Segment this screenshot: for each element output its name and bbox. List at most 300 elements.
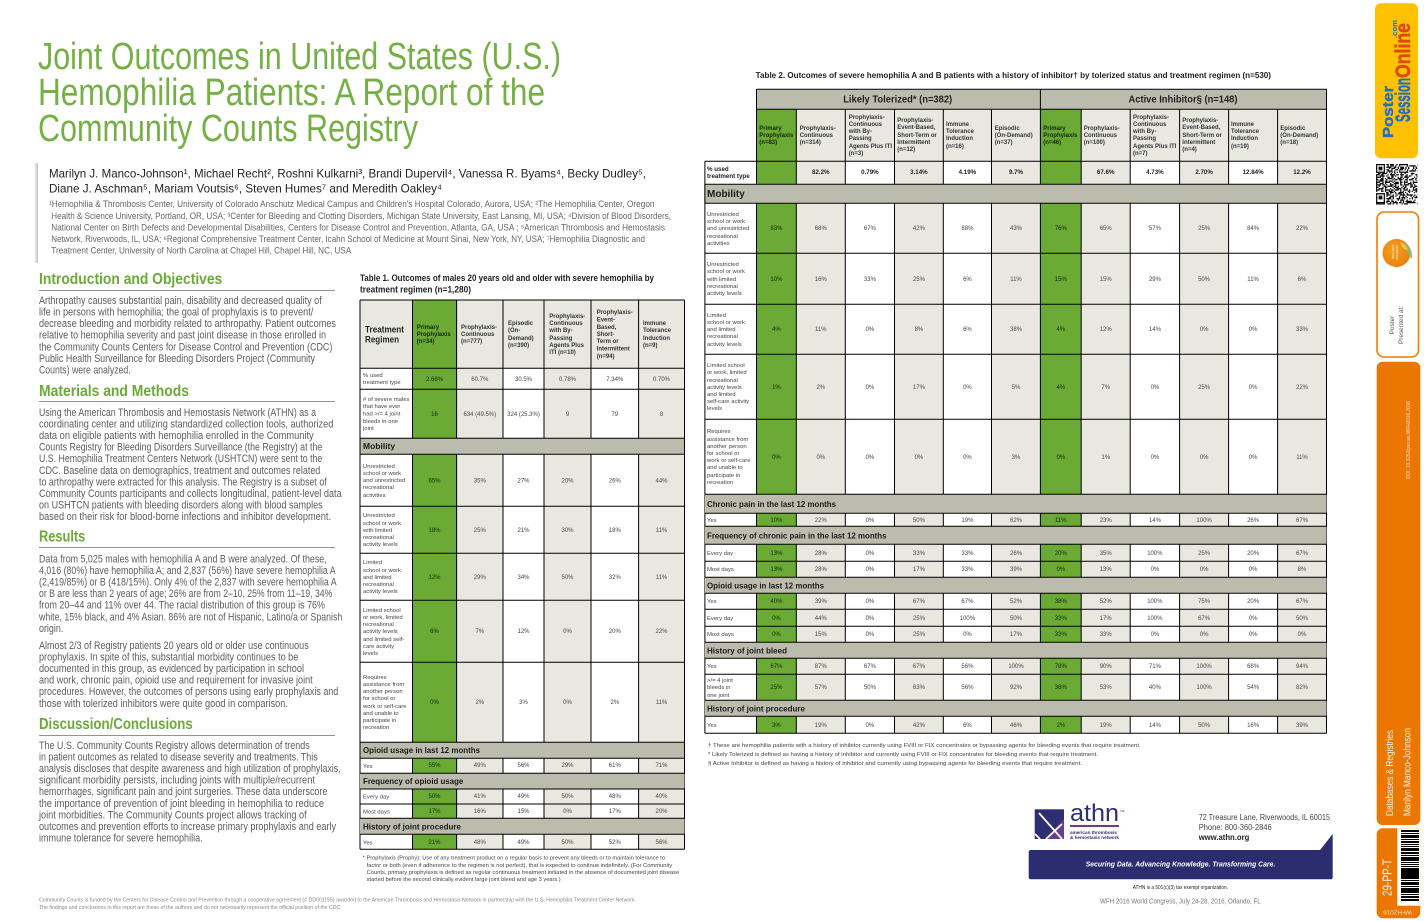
table 2 values: 20% — [1247, 599, 1260, 605]
table 1 row labels: and unrestricted — [363, 478, 405, 484]
table 2 column headers: active inhibitor: Prophylaxis- — [1084, 126, 1120, 132]
table 2 values: 52% — [1010, 599, 1023, 605]
table 2 values: 1% — [1101, 455, 1111, 461]
table 1 header: Continuous — [461, 332, 495, 338]
title: Community Counts Registry — [38, 108, 418, 150]
table 1 header: (n=777) — [461, 339, 482, 345]
table 2 column headers: likely tolerized: Prophylaxis — [759, 133, 794, 139]
table 1 header: (n=94) — [597, 354, 615, 360]
table 1 values: 49% — [517, 840, 530, 846]
table 2 row labels: or work, limited — [707, 370, 747, 376]
table 1 row labels: with limited — [362, 528, 392, 534]
table 1 row labels: participate in — [363, 718, 396, 724]
table 1 values: 11% — [656, 700, 668, 706]
table 1 row labels: work or self-care — [362, 704, 407, 710]
table 2 values: 67% — [770, 664, 783, 670]
table 1 row labels: activities — [363, 493, 386, 499]
table 2 values: 22% — [815, 518, 827, 524]
table 2 values: 0% — [1249, 616, 1258, 622]
table 1 row labels: activity levels — [363, 589, 398, 595]
table 2 row labels: activity levels — [707, 342, 742, 348]
table 2 values: 56% — [961, 664, 974, 670]
heading: results: Results — [39, 529, 85, 546]
affiliations: National Center on Birth Defects and Developmental Disabilities, Centers for Disease Control and Prevention, Atlanta, GA, USA ; ⁵American Thrombosis and Hemostasis — [51, 222, 665, 232]
table 1 row labels: joint — [362, 426, 374, 432]
table 1 values: 50% — [561, 794, 574, 800]
barcode — [1401, 830, 1419, 901]
table 2 row labels: activity levels — [707, 385, 742, 391]
table 2 row labels: Every day — [707, 616, 733, 622]
text block: materials and methods: Counts Registry for Bleeding Disorders Surveillance (the Registry) at the — [39, 442, 322, 454]
table 2 values: 0% — [1151, 385, 1160, 391]
table 2 values: 14% — [1149, 723, 1162, 729]
table 2 column headers: likely tolerized: (n=16) — [946, 144, 964, 150]
table 2 values: 0% — [866, 723, 875, 729]
table 1 primary prophylaxis values: 17% — [428, 809, 441, 815]
table 1 values: 29% — [474, 575, 486, 581]
table 2 row labels: Yes — [707, 723, 717, 729]
table 2 values: 84% — [1247, 226, 1260, 232]
table 2 column headers: active inhibitor: Prophylaxis — [1043, 133, 1078, 139]
table 2 column headers: active inhibitor: (n=4) — [1182, 147, 1197, 153]
table 2 row labels: treatment type — [707, 173, 750, 180]
athn address: Phone: 800-360-2846 — [1199, 822, 1272, 832]
table 2 values: 5% — [1012, 385, 1021, 391]
table 2 column headers: active inhibitor: Agents Plus ITI — [1133, 144, 1177, 150]
table 2 values: 67% — [961, 599, 974, 605]
table 1 row labels: school or work — [363, 568, 401, 574]
table 1 row labels: Unrestricted — [363, 513, 395, 519]
table 2 values: 50% — [913, 518, 926, 524]
table 2 row labels: activities — [707, 241, 730, 247]
table 2 values: 100% — [1196, 518, 1212, 524]
table 2 values: 6% — [963, 277, 972, 283]
athn address: www.athn.org — [1198, 832, 1249, 842]
table 1 row labels: Opioid usage in last 12 months — [363, 745, 480, 755]
table 2 values: 40% — [1149, 685, 1162, 691]
table 1 footnote: Counts, primary prophylaxis is defined as regular continuous treatment initiated in the absence of documented joint disease — [367, 870, 679, 876]
table 2 column headers: active inhibitor: Immune — [1231, 122, 1255, 128]
table 2 row labels: one joint — [707, 693, 730, 699]
table 1 values: 634 (49.5%) — [463, 412, 496, 418]
table 2 values: 56% — [961, 685, 974, 691]
text block: materials and methods: Using the American Thrombosis and Hemostasis Network (ATHN) as a — [39, 407, 316, 419]
table 2 column headers: active inhibitor: Short-Term or — [1182, 133, 1223, 139]
text block: results paragraph 1: or B are less than 2 years of age; 26% are from 2–10, 25% from 11–19, 34% — [39, 588, 333, 600]
table 2 values: 14% — [1149, 518, 1162, 524]
table 2 values: 4.19% — [959, 169, 977, 176]
table 2 values: 82% — [1296, 685, 1309, 691]
table 1 header: Primary — [417, 325, 440, 331]
table 1 values: 8 — [660, 412, 664, 418]
table 1 values: 7% — [475, 629, 485, 635]
text block: introduction: decrease bleeding and morbidity related to arthropathy. Patient outcomes — [39, 318, 336, 330]
table 2 values: 0% — [1298, 632, 1307, 638]
presented at text: Presented at: — [1398, 306, 1405, 344]
affiliations: Network, Riverwoods, IL, USA; ⁶Regional Comprehensive Treatment Center, Icahn School of Medicine at Mount Sinai, New York, NY, USA; ⁷Hemophilia Diagnostic and — [51, 234, 645, 244]
table 1 values: 41% — [474, 794, 486, 800]
category and author — [1384, 728, 1414, 816]
table 2 row labels: assistance from — [707, 437, 748, 443]
table 1 row labels: had >/= 4 joint — [363, 412, 401, 418]
table 2 values: 28% — [815, 551, 827, 557]
table 1 row labels: recreational — [363, 622, 394, 628]
table 2 column headers: likely tolerized: Short-Term or — [897, 133, 938, 139]
table 2 values: 11% — [1247, 277, 1260, 283]
text block: materials and methods: data on eligible patients with hemophilia enrolled in the Community — [39, 430, 314, 442]
table 2 column headers: active inhibitor: (n=100) — [1084, 140, 1105, 146]
table 2 values: 0% — [1151, 567, 1160, 573]
authors — [49, 166, 646, 196]
table 2 column headers: likely tolerized: Primary — [759, 126, 782, 132]
heading: discussion: Discussion/Conclusions — [39, 716, 193, 733]
table 2 values: 0% — [866, 599, 875, 605]
table 2 group headers — [843, 94, 1238, 106]
table 1 values: 34% — [517, 575, 530, 581]
table 2 column headers: likely tolerized: (On-Demand) — [995, 133, 1033, 139]
table 1 values: 56% — [517, 763, 530, 769]
funding note: The findings and conclusions in this report are those of the authors and do not necessarily represent the official position of the CDC. — [39, 905, 342, 911]
table 1 footnote: * Prophylaxis (Prophy): Use of any treatment product on a regular basis to prevent any bleeds or to maintain tolerance to — [363, 856, 665, 862]
table 2 column headers: likely tolerized: Passing — [849, 136, 872, 142]
table 1 header: Based, — [597, 325, 617, 331]
table 1 values: 22% — [655, 629, 668, 635]
table 2 values: 40% — [770, 599, 783, 605]
table 2 column headers: likely tolerized: Event-Based, — [897, 125, 936, 131]
table 2 values: 3.14% — [910, 169, 928, 176]
table 2 values: 0% — [1249, 567, 1258, 573]
table 1 row labels: Mobility — [363, 441, 395, 451]
table 2 values: 94% — [1296, 664, 1309, 670]
panel: results — [38, 529, 342, 710]
table 2 values: 63% — [913, 685, 926, 691]
table 2 values: 13% — [1100, 567, 1112, 573]
table 1 row labels: activity levels — [363, 542, 398, 548]
logo wordmark — [1070, 800, 1125, 840]
table 2 row labels: Unrestricted — [707, 262, 739, 268]
text block: discussion: immune tolerance for severe hemophilia. — [39, 832, 203, 844]
table 1 row labels: school or work — [363, 521, 401, 527]
table 1 values: 18% — [609, 528, 621, 534]
table 1 title: treatment regimen (n=1,280) — [360, 284, 471, 294]
table 1 values: 79 — [611, 412, 619, 418]
table 2 values: 0% — [866, 567, 875, 573]
table 2 row labels: and limited — [707, 392, 736, 398]
table 2 group headers: Active Inhibitor§ (n=148) — [1128, 94, 1238, 106]
table 1 values: 16% — [474, 809, 486, 815]
table 2 values: 12% — [1100, 327, 1112, 333]
table 2 row labels: Yes — [707, 599, 717, 605]
table 2 values: 57% — [1149, 226, 1162, 232]
text block: discussion: The U.S. Community Counts Registry allows determination of trends — [39, 740, 310, 752]
table 2 values: 33% — [913, 551, 926, 557]
table 1 header: Agents Plus — [549, 343, 585, 349]
table 2 values: 17% — [1010, 632, 1023, 638]
table 1 values: 26% — [609, 478, 621, 484]
table 1 row labels: that have ever — [363, 404, 400, 410]
table 2 column headers: active inhibitor: (n=46) — [1043, 140, 1061, 146]
table 2 row labels: Limited — [707, 313, 726, 319]
table 1 row labels: Limited school — [363, 608, 401, 614]
table 2 values: 4% — [1056, 327, 1066, 333]
table 2 values: 67% — [1198, 616, 1211, 622]
table 1 row labels: recreational — [363, 535, 394, 541]
table 1 row labels: and limited — [363, 575, 392, 581]
table 2 values: 0% — [866, 616, 875, 622]
table 2 values: 11% — [1010, 277, 1022, 283]
table 2 values: 15% — [1100, 277, 1112, 283]
table 2 values: 1% — [772, 385, 781, 391]
table 2 values: 33% — [961, 551, 974, 557]
table 2 column headers: likely tolerized: (n=83) — [759, 140, 777, 146]
text block: results paragraph 1: (2,419/85%) or B (418/15%). Only 4% of the 2,837 with severe hemophilia A — [39, 577, 337, 589]
table 2 values: 67% — [1296, 551, 1309, 557]
presented at text: Poster — [1389, 315, 1396, 334]
table 2 values: 33% — [1055, 632, 1067, 638]
table 2 values: 25% — [1198, 385, 1211, 391]
table 1 values: 48% — [474, 840, 486, 846]
table 2 column headers: active inhibitor: Passing — [1133, 136, 1156, 142]
table 2 values: 0% — [1249, 327, 1258, 333]
table 1 values: 0.78% — [559, 377, 577, 383]
table 1 title: Table 1. Outcomes of males 20 years old and older with severe hemophilia by — [360, 273, 655, 283]
text block: introduction: Counts) were analyzed. — [39, 364, 131, 376]
table 2 column headers: active inhibitor: (n=19) — [1231, 144, 1249, 150]
table 1 header: Demand) — [508, 336, 534, 342]
table 2 column headers: likely tolerized: Prophylaxis- — [849, 115, 885, 121]
table 2 values: 4% — [772, 327, 781, 333]
table 2 column headers: likely tolerized: (n=12) — [897, 147, 915, 153]
title: Joint Outcomes in United States (U.S.) — [38, 36, 561, 78]
table 1 header: (n=34) — [417, 339, 435, 345]
text block: materials and methods — [39, 407, 342, 523]
table 2 values: 71% — [1149, 664, 1162, 670]
table 2 row labels: recreational — [707, 234, 738, 240]
doi: DOI: 10.3252/pso.eu.WFH2016.2016 — [1406, 401, 1412, 479]
table 1 row labels: recreation — [363, 725, 389, 731]
table 2 values: 0% — [772, 632, 781, 638]
table 2 values: 0% — [1249, 632, 1258, 638]
table 2 values: 20% — [1055, 551, 1067, 557]
table 2 row labels: Mobility — [707, 189, 745, 200]
table 1 row labels: Limited — [363, 560, 382, 566]
table 1 primary prophylaxis values — [426, 377, 444, 846]
table 1 primary prophylaxis values: 2.66% — [426, 377, 444, 383]
table 1 header: Prophylaxis- — [549, 314, 585, 320]
category and author: Marilyn Manco-Johnson — [1402, 728, 1414, 816]
text block: discussion: in patient outcomes as related to disease severity and treatments. This — [39, 752, 318, 764]
table 2 column headers: active inhibitor: Continuous — [1084, 133, 1118, 139]
table 2 row labels: recreational — [707, 378, 738, 384]
table 2 column headers: active inhibitor: Intermittent — [1182, 140, 1215, 146]
table 2 row labels: with limited — [706, 277, 736, 283]
table 1 header: Term or — [597, 339, 619, 345]
table 1 values: 56% — [655, 840, 668, 846]
table 2 values: 39% — [1010, 567, 1023, 573]
table 1 row labels: Requires — [363, 675, 387, 681]
table 2 column headers: likely tolerized — [759, 115, 1033, 157]
table 2 row labels: recreation — [707, 480, 733, 486]
table 2 column headers: active inhibitor: Event-Based, — [1182, 125, 1221, 131]
table 1 primary prophylaxis values: 55% — [428, 763, 441, 769]
table 2 values: 0% — [963, 632, 972, 638]
table 2 row labels: and unrestricted — [707, 226, 749, 232]
table 2 values: 0% — [963, 455, 972, 461]
table 2 row labels: another person — [707, 444, 747, 450]
table 2 values: 4.73% — [1146, 169, 1164, 176]
table 1 header: Prophylaxis — [417, 332, 451, 338]
table 2 values: 50% — [1010, 616, 1023, 622]
text block: discussion: significant morbidity persists, including joints with multiple/recurrent — [39, 775, 315, 787]
table 2 values: 38% — [1055, 599, 1067, 605]
text block: results paragraph 2: prophylaxis. In spite of this, substantial morbidity continues to be — [39, 652, 298, 664]
sidebar panel: presented at — [1377, 212, 1418, 357]
table 2 values: 25% — [913, 632, 926, 638]
table 2 column headers: active inhibitor: Prophylaxis- — [1133, 115, 1169, 121]
table 2 values: 54% — [1247, 685, 1260, 691]
table 2 values: 75% — [1198, 599, 1211, 605]
table 2 row labels: and limited — [707, 327, 736, 333]
table 2 values: 33% — [1055, 616, 1067, 622]
text block: introduction: Arthropathy causes substantial pain, disability and decreased quality of — [39, 295, 322, 307]
text block: discussion — [38, 740, 341, 844]
table 1 row labels: and unable to — [363, 711, 399, 717]
table 2 row labels: Every day — [707, 551, 733, 557]
table 2 values: 67% — [1296, 518, 1309, 524]
table 2 values: 0% — [866, 632, 875, 638]
table 2 values: 0% — [866, 455, 875, 461]
table 2 column headers: likely tolerized: (n=37) — [995, 140, 1013, 146]
text block: results paragraph 2: and work, chronic pain, opioid use and requirement for invasive joint — [39, 675, 313, 687]
text block: materials and methods: to arthropathy were extracted for this analysis. The Registry is a subset of — [39, 476, 327, 488]
table 2 row labels: Yes — [707, 518, 717, 524]
table 2 values: 39% — [1296, 723, 1309, 729]
table 2 values: 0% — [1151, 632, 1160, 638]
table 2 row labels: school or work — [707, 320, 745, 326]
table 1 row labels: bleeds in one — [363, 419, 399, 425]
table 1 values: 12% — [517, 629, 530, 635]
text block: materials and methods: CDC. Baseline data on demographics, treatment and outcomes related — [39, 465, 320, 477]
table 2 values: 0% — [866, 385, 875, 391]
text block: discussion: outcomes and prevention efforts to increase primary prophylaxis and early — [39, 821, 337, 833]
table 1 header: ITI (n=10) — [549, 350, 576, 356]
table 1 header: with By- — [548, 328, 573, 334]
panel: discussion and conclusions — [38, 716, 341, 844]
table 2 values: 35% — [1100, 551, 1112, 557]
icon: athn mark — [1035, 809, 1064, 839]
table 1 values: 52% — [609, 840, 621, 846]
table 1 row labels: Yes — [363, 764, 373, 770]
table 1 header: Intermittent — [597, 346, 630, 352]
table 1 values: 35% — [474, 478, 486, 484]
table 2 row labels: levels — [707, 406, 722, 412]
table 2 values: 50% — [864, 685, 877, 691]
table 2 values: 25% — [1198, 226, 1211, 232]
table 2 column headers: active inhibitor: with By- — [1132, 129, 1156, 135]
table 2 row labels: self-care activity — [707, 399, 749, 405]
table 1 header: Prophylaxis- — [597, 310, 633, 316]
table 2 row labels: work or self-care — [706, 458, 751, 464]
table 1 row labels: and limited self- — [363, 637, 404, 643]
table 1 values: 11% — [656, 528, 668, 534]
table 2 values: 82.2% — [812, 169, 830, 176]
table 2 values: 23% — [1100, 518, 1112, 524]
table 1 row labels: school or work — [363, 471, 401, 477]
table 1 row labels — [362, 373, 480, 846]
table 2 footnotes: § Active Inhibitor is defined as having a history of inhibitor and currently using bypassing agents for bleeding events that require treatment. — [708, 761, 1082, 767]
text block: materials and methods: coordinating center and utilizing standardized collection tools, authorized — [39, 419, 333, 431]
athn banner — [1029, 834, 1333, 879]
table 1 values: 2% — [610, 700, 620, 706]
table 2 values: 3% — [772, 723, 781, 729]
text block: materials and methods: on USHTCN patients with bleeding disorders along with blood samples — [39, 500, 323, 512]
affiliations: Health & Science University, Portland, OR, USA; ³Center for Bleeding and Clotting Disorders, Michigan State University, East Lansing, MI, USA; ⁴Division of Blood Disorders, — [51, 211, 671, 221]
table 2 values: 13% — [770, 551, 783, 557]
table 2 values: 65% — [1100, 226, 1112, 232]
table 1 values: 49% — [474, 763, 486, 769]
sidebar panel: poster number and barcode — [1377, 828, 1420, 918]
table 2 values: 0% — [1200, 567, 1209, 573]
table 2 values: 0% — [866, 518, 875, 524]
table 2 values: 22% — [1296, 385, 1309, 391]
table 2 values: 62% — [1010, 518, 1023, 524]
authors: Marilyn J. Manco-Johnson¹, Michael Recht², Roshni Kulkarni³, Brandi Dupervil⁴, Vanessa R. Byams⁴, Becky Dudley⁵, — [49, 166, 646, 180]
table 2 values: 0% — [963, 385, 972, 391]
table 2 values: 76% — [1055, 226, 1067, 232]
table 2 values: 8% — [915, 327, 924, 333]
text block: introduction: Public Health Surveillance for Bleeding Disorders Project (Community — [39, 353, 316, 365]
table 2 column headers: likely tolerized: Continuous — [849, 122, 883, 128]
sidebar logo: poster session online — [1375, 3, 1418, 158]
text block: results paragraph 2 — [39, 640, 338, 710]
table 2 values: 25% — [913, 277, 926, 283]
table 2 values: 11% — [1296, 455, 1308, 461]
table 2 values: 25% — [913, 616, 926, 622]
table 2 values: 13% — [770, 567, 783, 573]
table 1 row labels: another person — [363, 689, 403, 695]
table 1 header: Continuous — [549, 321, 583, 327]
table 1 values: 0% — [563, 809, 573, 815]
table 1 primary prophylaxis values: 21% — [428, 840, 441, 846]
table 2 values: 15% — [1055, 277, 1067, 283]
table 2 values: 0% — [1200, 455, 1209, 461]
table 2 values: 6% — [963, 723, 972, 729]
panel: materials and methods — [39, 383, 342, 523]
table 1 header: Prophylaxis- — [461, 325, 497, 331]
table 2 column headers: likely tolerized: Induction — [946, 136, 973, 142]
table 1 header: Induction — [643, 336, 670, 342]
table 1 values: 15% — [517, 809, 530, 815]
table 2 values: 68% — [815, 226, 827, 232]
table 1 values: 20% — [609, 629, 621, 635]
table 2 column headers: active inhibitor: (On-Demand) — [1280, 133, 1318, 139]
table 2 values: 19% — [1100, 723, 1112, 729]
table 2 values: 29% — [1149, 277, 1162, 283]
table 2 column headers: likely tolerized: Immune — [946, 122, 970, 128]
table 1 values: 9 — [566, 412, 570, 418]
table 2 column headers: likely tolerized: Continuous — [800, 133, 834, 139]
table 2 values: 0% — [1249, 455, 1258, 461]
table 2 column headers: likely tolerized: Tolerance — [946, 129, 975, 135]
table 2 row labels: >/= 4 joint — [707, 678, 733, 684]
table 2 row labels: Requires — [707, 429, 731, 435]
table 2 values: 26% — [1247, 518, 1260, 524]
table 2 group headers: Likely Tolerized* (n=382) — [843, 94, 952, 106]
text block: discussion: joint morbidities. The Community Counts project allows tracking of — [38, 809, 307, 821]
sidebar logo: poster session online: .com — [1392, 20, 1399, 38]
table 2 values: 87% — [815, 664, 827, 670]
text block: materials and methods: based on their risk for blood-borne infections and inhibitor development. — [39, 511, 331, 523]
